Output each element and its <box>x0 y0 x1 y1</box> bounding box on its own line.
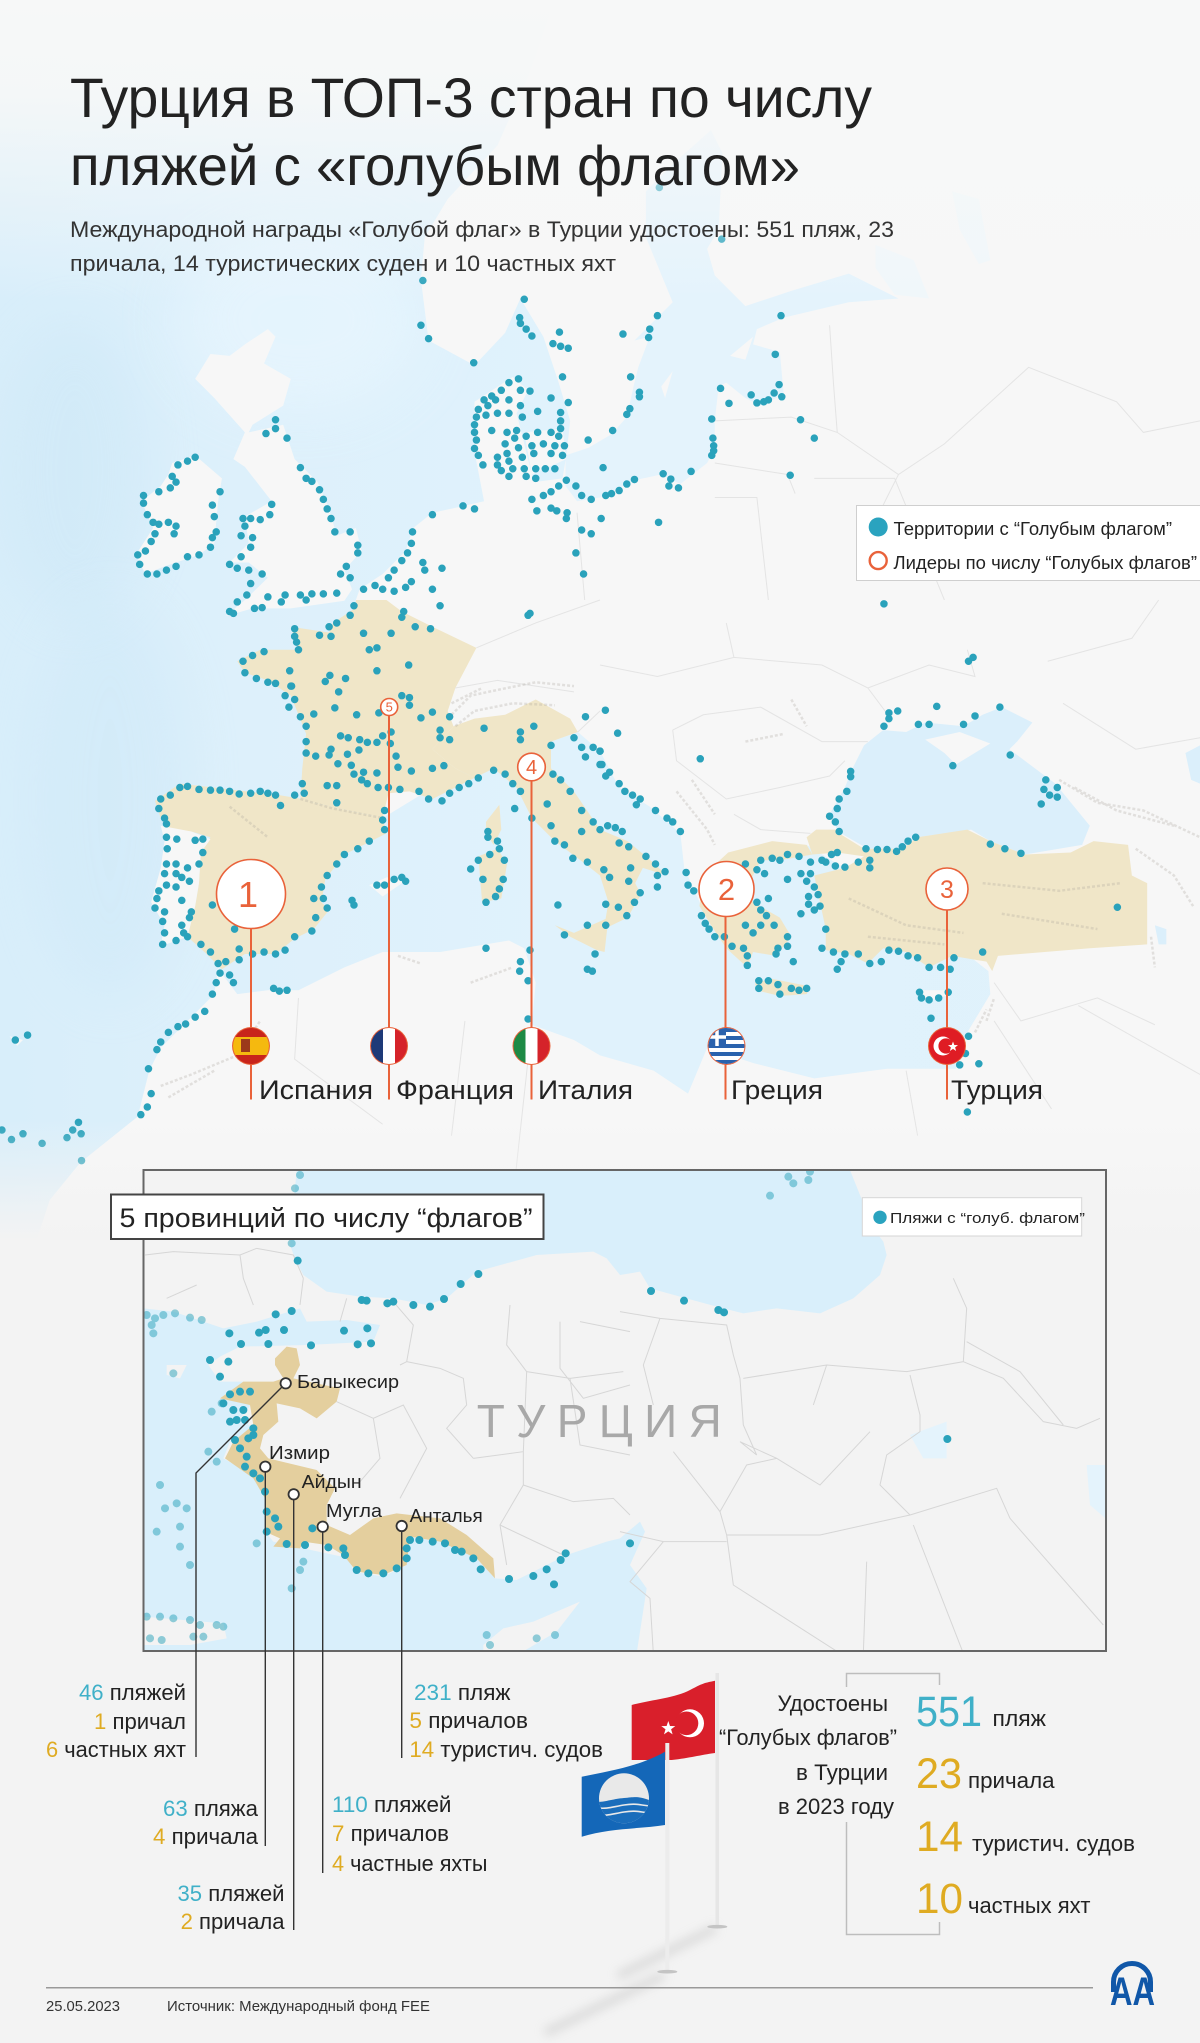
marker: Turkey, rank 3: Турция <box>951 1075 1043 1105</box>
province Antalya: 231 пляж <box>414 1680 511 1705</box>
marker: Turkey, rank 3: 3 <box>940 876 954 904</box>
summary: awarded in Turkey: частных яхт <box>968 1893 1090 1918</box>
flags illustration <box>545 1673 727 2033</box>
marker: Greece, rank 2: 2 <box>718 872 735 907</box>
province Izmir: Измир <box>269 1443 330 1463</box>
summary: awarded in Turkey: в 2023 году <box>778 1794 894 1819</box>
marker: France, rank 5: Франция <box>396 1075 514 1105</box>
province Aydin: Айдын <box>302 1472 362 1492</box>
summary: awarded in Turkey: Удостоены <box>778 1691 888 1716</box>
logo: Anadolu Agency <box>1110 1964 1155 2014</box>
province Izmir: 4 причала <box>153 1824 259 1849</box>
marker: Italy, rank 4: 4 <box>526 757 537 779</box>
province Balikesir: 6 частных яхт <box>46 1737 186 1762</box>
marker: France, rank 5 <box>370 698 514 1105</box>
legend: map of Europe <box>856 506 1200 580</box>
marker: Spain, rank 1 <box>216 860 373 1105</box>
legend: map of Europe: Лидеры по числу “Голубых флагов” <box>894 553 1197 573</box>
summary: awarded in Turkey: пляж <box>992 1706 1046 1731</box>
marker: Italy, rank 4 <box>512 753 633 1105</box>
summary: awarded in Turkey: 10 <box>916 1875 963 1923</box>
footer: 25.05.2023 <box>46 1999 120 2015</box>
province Balikesir: 46 пляжей <box>79 1680 186 1705</box>
legend: map of Turkey: Пляжи с “голуб. флагом” <box>890 1210 1085 1227</box>
marker: Turkey, rank 3 <box>926 868 1043 1105</box>
province Balikesir: 1 причал <box>94 1709 186 1734</box>
province Antalya: Анталья <box>410 1506 483 1526</box>
province Izmir: 63 пляжа <box>163 1796 259 1821</box>
marker: Italy, rank 4: Италия <box>538 1075 633 1105</box>
province Izmir <box>153 1443 330 1849</box>
footer <box>46 1987 1093 2015</box>
province Mugla <box>318 1501 488 1876</box>
legend: map of Turkey <box>862 1198 1085 1236</box>
province Mugla: 4 частные яхты <box>332 1851 488 1876</box>
summary: awarded in Turkey: “Голубых флагов” <box>719 1725 897 1750</box>
marker: France, rank 5: 5 <box>386 700 393 714</box>
province Antalya: 14 туристич. судов <box>409 1737 603 1762</box>
province Mugla: 7 причалов <box>332 1821 449 1846</box>
marker: Spain, rank 1: 1 <box>238 874 258 915</box>
subtitle: Международной награды «Голубой флаг» в Турции удостоены: 551 пляж, 23 <box>70 217 894 242</box>
map of Turkey: ТУРЦИЯ <box>477 1395 722 1447</box>
subtitle <box>70 217 894 276</box>
summary: awarded in Turkey: причала <box>968 1768 1055 1793</box>
summary: awarded in Turkey: туристич. судов <box>972 1831 1135 1856</box>
province Aydin: 2 причала <box>181 1909 285 1934</box>
province Aydin: 35 пляжей <box>178 1881 284 1906</box>
marker: Greece, rank 2: Греция <box>731 1075 823 1105</box>
footer: Источник: Международный фонд FEE <box>167 1999 430 2015</box>
marker: Greece, rank 2 <box>699 862 823 1105</box>
province Mugla: 110 пляжей <box>332 1792 452 1817</box>
province Balikesir: Балыкесир <box>297 1372 399 1392</box>
title: пляжей с «голубым флагом» <box>70 134 800 197</box>
title <box>70 66 872 197</box>
marker: Spain, rank 1: Испания <box>259 1075 373 1105</box>
summary: awarded in Turkey: 23 <box>916 1750 962 1798</box>
province Antalya <box>396 1506 603 1762</box>
province Aydin <box>178 1472 362 1934</box>
map of Turkey <box>143 1170 1123 1653</box>
title: Турция в ТОП-3 стран по числу <box>70 66 872 129</box>
province Mugla: Мугла <box>326 1501 383 1521</box>
subtitle: причала, 14 туристических суден и 10 частных яхт <box>70 251 616 276</box>
legend: map of Europe: Территории с “Голубым флагом” <box>894 519 1172 539</box>
logo: Anadolu Agency: AA <box>1110 1970 1155 2014</box>
map of Europe <box>0 0 1200 1309</box>
summary: awarded in Turkey: в Турции <box>796 1760 888 1785</box>
summary: awarded in Turkey <box>719 1674 1135 1934</box>
summary: awarded in Turkey: 14 <box>916 1813 963 1861</box>
summary: awarded in Turkey: 551 <box>916 1688 982 1736</box>
province Antalya: 5 причалов <box>409 1708 528 1733</box>
province Balikesir <box>46 1372 399 1762</box>
heading: top provinces: 5 провинций по числу “флагов” <box>120 1203 532 1233</box>
heading: top provinces <box>111 1194 544 1239</box>
